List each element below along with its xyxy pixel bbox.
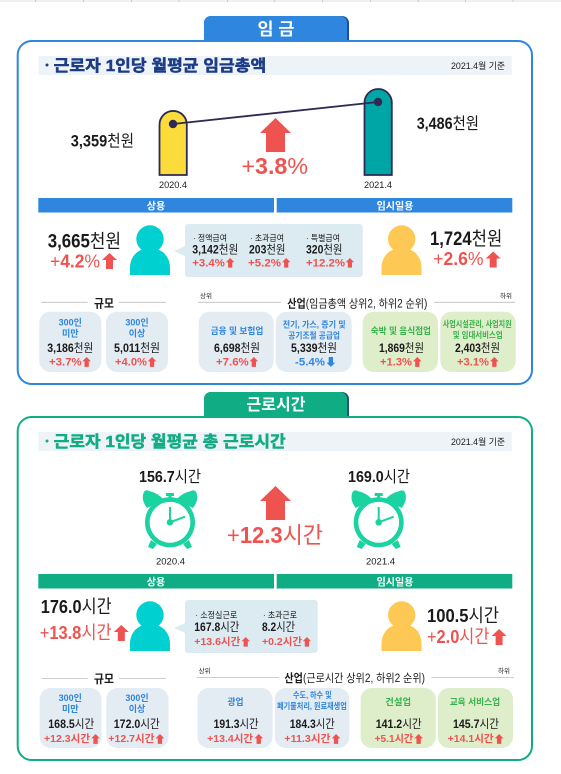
callout: regular hours breakdown: · 소정실근로 <box>195 610 237 620</box>
card: business facilities: 및 임대서비스업 <box>453 330 503 340</box>
heading: size <box>41 296 166 310</box>
header: regular: 상용 <box>147 575 165 588</box>
icon: regular worker <box>130 225 170 275</box>
card: finance and insurance <box>199 312 274 372</box>
figure: regular total: 176.0시간 <box>41 596 112 617</box>
heading: size <box>41 672 166 686</box>
callout: regular wage breakdown: +3.4% <box>192 258 225 270</box>
heading: industry: 상위 <box>199 666 211 675</box>
tab: working hours heading <box>204 392 349 416</box>
figure: temporary total <box>430 228 502 269</box>
card: 300 or more: +4.0% <box>115 357 147 369</box>
callout: regular hours breakdown: +13.6시간 <box>194 636 241 648</box>
card: 300 or more: 172.0시간 <box>114 717 160 731</box>
clock: 2021.4 <box>348 468 410 566</box>
card: construction: 141.2시간 <box>376 717 422 731</box>
clock: 2020.4: 156.7시간 <box>139 468 201 486</box>
bar chart: total wage: 2020.4 <box>159 180 187 190</box>
card: under 300: 3,186천원 <box>47 340 93 355</box>
tab: wages heading <box>204 16 349 40</box>
card: education services: 교육 서비스업 <box>450 696 500 707</box>
heading bar: average total wage <box>38 56 512 75</box>
card: electricity, gas, steam <box>276 312 352 372</box>
header: regular <box>38 574 274 588</box>
card: under 300: 미만 <box>62 704 79 714</box>
figure: temporary total: +2.0시간 <box>427 626 489 647</box>
card: construction: +5.1시간 <box>375 733 414 745</box>
panel: working hours <box>18 392 532 760</box>
figure: temporary total <box>427 605 507 647</box>
clock: 2020.4: 2020.4 <box>156 556 185 566</box>
figure: regular total: 3,665천원 <box>48 230 121 252</box>
heading: industry <box>196 666 514 685</box>
card: mining: 광업 <box>228 696 244 707</box>
callout: regular wage breakdown: · 초과급여 <box>250 233 284 243</box>
callout: regular wage breakdown <box>174 224 363 277</box>
figure: temporary total: +2.6% <box>433 248 484 269</box>
increase figure: +12.3시간 <box>227 522 323 548</box>
card: under 300 <box>39 312 101 372</box>
header: temporary <box>277 574 512 588</box>
heading: size: 규모 <box>94 296 114 310</box>
card: under 300: +12.3시간 <box>44 733 90 745</box>
card: 300 or more <box>106 688 168 748</box>
card: 300 or more: 이상 <box>129 703 146 714</box>
card: under 300: 300인 <box>59 693 82 703</box>
callout: regular hours breakdown: 167.8시간 <box>194 620 239 634</box>
panel frame <box>18 417 532 760</box>
card: education services: +14.1시간 <box>448 733 494 745</box>
card: 300 or more: 이상 <box>129 328 146 339</box>
clock: 2020.4 <box>139 468 201 566</box>
header: temporary <box>277 198 512 212</box>
card: 300 or more: 5,011천원 <box>114 340 160 355</box>
clock: 2021.4: 169.0시간 <box>348 468 410 486</box>
figure: temporary total: 1,724천원 <box>430 228 502 250</box>
card: finance and insurance: 6,698천원 <box>214 340 260 355</box>
heading: industry: 하위 <box>500 291 512 300</box>
card: finance and insurance: +7.6% <box>216 357 249 369</box>
heading bar: average total hours: 2021.4월 기준 <box>451 436 505 447</box>
icon: regular worker <box>130 601 170 651</box>
card: business facilities <box>440 312 516 372</box>
heading: industry <box>198 291 515 310</box>
card: water and waste: 수도, 하수 및 <box>293 690 332 700</box>
panel: wages <box>18 16 532 384</box>
bar chart: total wage: 2021.4 <box>364 180 392 190</box>
bar chart: total wage: 3,486천원 <box>417 114 479 133</box>
heading bar: average total wage: 2021.4월 기준 <box>451 60 505 71</box>
card: construction: 건설업 <box>385 696 411 707</box>
callout: regular hours breakdown: 8.2시간 <box>262 620 295 634</box>
card: electricity, gas, steam: -5.4% <box>295 357 325 369</box>
header: temporary: 임시일용 <box>377 199 413 212</box>
callout: regular wage breakdown: 203천원 <box>249 242 286 256</box>
card: education services <box>438 688 513 748</box>
card: 300 or more <box>106 312 168 372</box>
card: accommodation and food <box>363 312 438 372</box>
tab: wages heading: 임 금 <box>258 20 294 39</box>
card: mining: +13.4시간 <box>207 733 253 745</box>
card: business facilities: 2,403천원 <box>455 340 500 355</box>
card: business facilities: 사업시설관리, 사업지원 <box>443 319 512 329</box>
card: finance and insurance: 금융 및 보험업 <box>211 325 263 336</box>
heading: industry: 산업(임금총액 상위2, 하위2 순위) <box>287 296 427 310</box>
card: under 300: +3.7% <box>49 357 82 369</box>
header: temporary: 임시일용 <box>377 575 413 588</box>
callout: regular wage breakdown: · 특별급여 <box>306 233 340 243</box>
arrow: wage increase <box>260 118 291 152</box>
heading: industry: 상위 <box>200 291 212 300</box>
card: water and waste: +11.3시간 <box>284 733 331 745</box>
callout: regular wage breakdown: +12.2% <box>306 258 345 270</box>
card: education services: 145.7시간 <box>453 717 499 731</box>
figure: temporary total: 100.5시간 <box>427 605 499 626</box>
increase figure: +3.8% <box>242 153 308 179</box>
figure: regular total <box>40 596 129 643</box>
card: electricity, gas, steam: 공기조절 공급업 <box>288 330 340 340</box>
header: regular <box>38 198 274 212</box>
card: accommodation and food: 숙박 및 음식점업 <box>371 325 431 336</box>
figure: regular total: +13.8시간 <box>40 622 112 643</box>
card: water and waste: 184.3시간 <box>290 717 335 731</box>
card: water and waste: 폐기물처리, 원료재생업 <box>277 701 347 711</box>
card: business facilities: +3.1% <box>457 357 489 369</box>
callout: regular hours breakdown: · 초과근로 <box>263 610 297 620</box>
card: under 300: 168.5시간 <box>48 717 94 731</box>
icon: temporary worker <box>382 225 422 275</box>
card: under 300: 미만 <box>62 329 79 339</box>
bar chart: total wage: 3,359천원 <box>71 132 134 150</box>
bar chart: total wage <box>71 89 479 190</box>
card: mining: 191.3시간 <box>214 717 259 731</box>
panel frame <box>18 41 532 384</box>
card: electricity, gas, steam: 5,339천원 <box>291 340 337 355</box>
icon: temporary worker <box>382 601 422 651</box>
callout: regular wage breakdown: · 정액급여 <box>193 233 227 243</box>
callout: regular wage breakdown: 320천원 <box>306 242 342 256</box>
card: 300 or more: +12.7시간 <box>108 733 155 745</box>
arrow: hours increase <box>260 486 291 520</box>
heading bar: average total hours <box>38 432 512 451</box>
callout: regular hours breakdown <box>174 600 318 653</box>
figure: regular total: +4.2% <box>50 250 100 271</box>
card: electricity, gas, steam: 전기, 가스, 증기 및 <box>283 319 346 329</box>
card: under 300: 300인 <box>59 318 82 328</box>
card: construction <box>361 688 436 748</box>
heading: industry: 하위 <box>498 666 510 675</box>
card: under 300 <box>40 688 101 748</box>
card: 300 or more: 300인 <box>125 693 149 703</box>
heading: industry: 산업(근로시간 상위2, 하위2 순위) <box>284 671 425 685</box>
card: 300 or more: 300인 <box>125 318 149 328</box>
heading: size: 규모 <box>94 672 114 686</box>
heading bar: average total wage: 근로자 1인당 월평균 임금총액 <box>54 57 266 75</box>
clock: 2021.4: 2021.4 <box>366 556 395 566</box>
tab: working hours heading: 근로시간 <box>246 396 306 414</box>
card: water and waste <box>275 688 349 748</box>
heading bar: average total hours: 근로자 1인당 월평균 총 근로시간 <box>54 433 286 451</box>
card: accommodation and food: 1,869천원 <box>379 340 424 355</box>
figure: regular total <box>48 230 121 271</box>
header: regular: 상용 <box>147 199 165 212</box>
callout: regular wage breakdown: 3,142천원 <box>192 242 238 256</box>
callout: regular wage breakdown: +5.2% <box>248 258 281 270</box>
card: mining <box>198 688 273 748</box>
callout: regular hours breakdown: +0.2시간 <box>262 636 302 648</box>
card: accommodation and food: +1.3% <box>380 357 412 369</box>
